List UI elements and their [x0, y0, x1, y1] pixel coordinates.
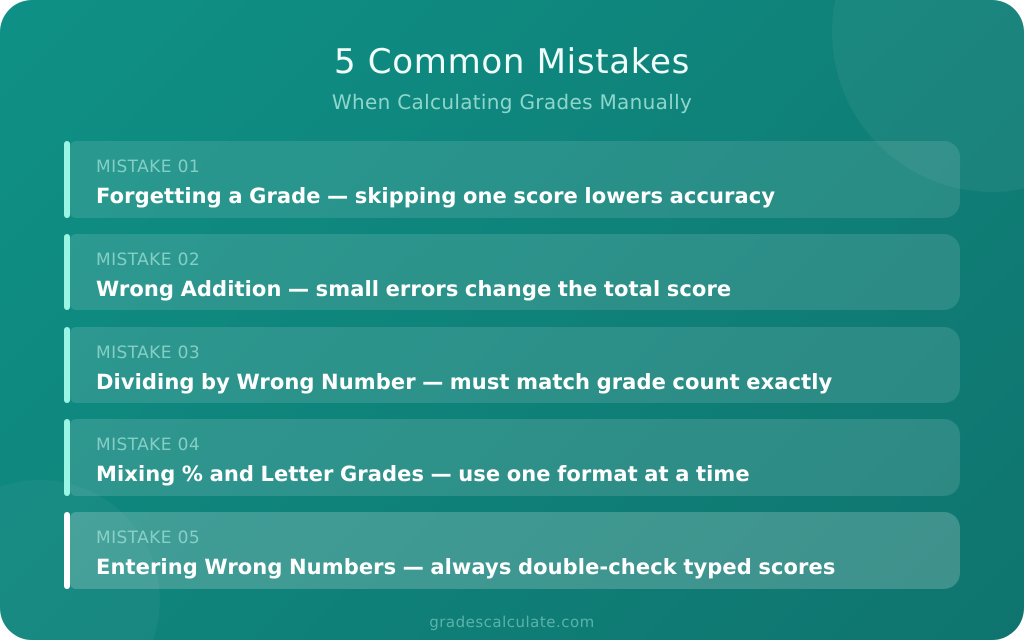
label: mistake 04: MISTAKE 04 — [96, 435, 200, 455]
subtitle: When Calculating Grades Manually — [332, 90, 692, 114]
panel: mistake 01 — [64, 141, 960, 218]
label: mistake 05: MISTAKE 05 — [96, 528, 200, 548]
label: mistake 01: MISTAKE 01 — [96, 157, 200, 177]
text: mistake 05: Entering Wrong Numbers — always double-check typed scores — [96, 555, 835, 579]
label: mistake 03: MISTAKE 03 — [96, 343, 200, 363]
text: mistake 04: Mixing % and Letter Grades — use one format at a time — [96, 462, 750, 486]
text: mistake 03: Dividing by Wrong Number — must match grade count exactly — [96, 370, 832, 394]
label: mistake 02: MISTAKE 02 — [96, 250, 200, 270]
panel: mistake 03 — [64, 327, 960, 403]
footer url: gradescalculate.com — [429, 613, 595, 631]
title: 5 Common Mistakes — [334, 42, 690, 82]
panel: mistake 04 — [64, 419, 960, 496]
text: mistake 02: Wrong Addition — small errors change the total score — [96, 277, 731, 301]
panel: mistake 02 — [64, 234, 960, 310]
text: mistake 01: Forgetting a Grade — skipping one score lowers accuracy — [96, 184, 775, 208]
panel: mistake 05 — [64, 512, 960, 589]
